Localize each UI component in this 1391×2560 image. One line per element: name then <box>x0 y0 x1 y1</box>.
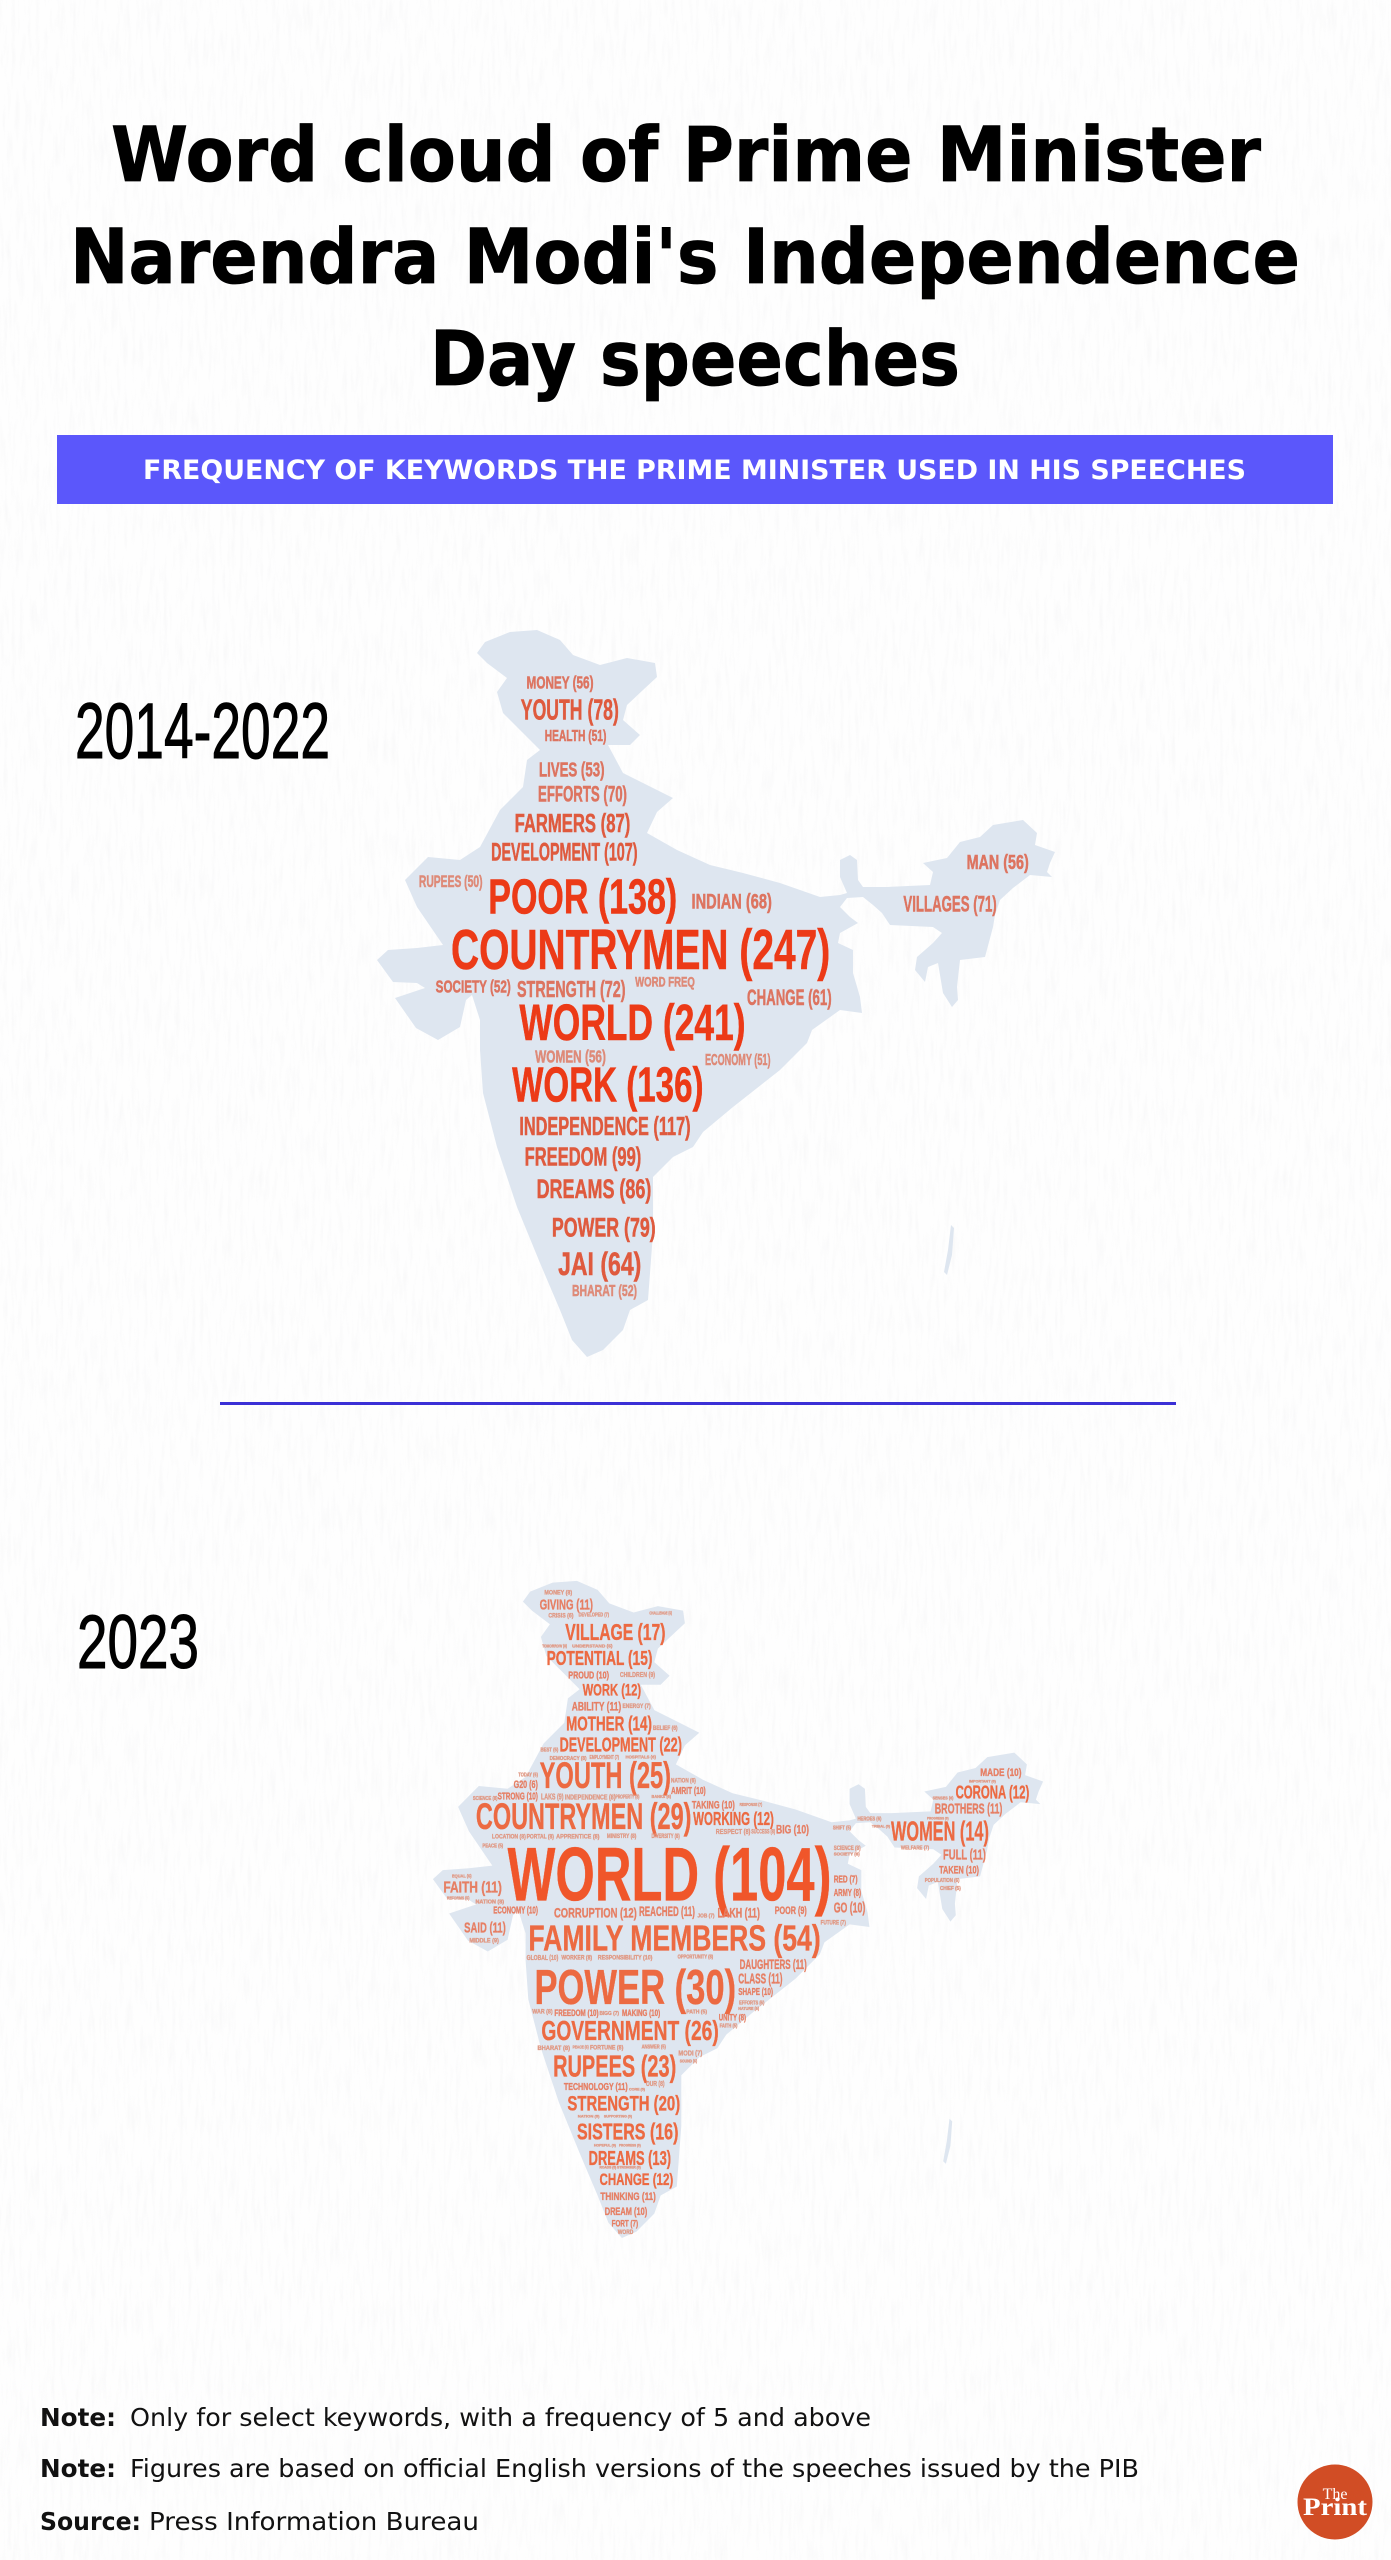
word cloud 2014-2022: INDEPENDENCE (117) <box>519 1113 691 1141</box>
word cloud 2023: JOB (7) <box>698 1913 714 1919</box>
word cloud 2023: LOCATION (8) <box>492 1832 526 1840</box>
word cloud 2023: MIDDLE (9) <box>469 1937 499 1944</box>
word cloud 2023: SENSES (6) <box>933 1796 954 1801</box>
notes and source: Figures are based on official English versions of the speeches issued by the PIB <box>130 2454 1139 2483</box>
word cloud 2014-2022: YOUTH (78) <box>521 693 619 725</box>
word cloud 2023: NATURE (5) <box>738 2007 759 2012</box>
word cloud 2023: SUCCESS (8) <box>751 1827 775 1835</box>
word cloud 2023: DREAMS (13) <box>589 2147 671 2169</box>
word cloud 2023: EQUAL (5) <box>452 1874 472 1879</box>
word cloud 2023: WORKING (12) <box>693 1809 774 1829</box>
India map shape <box>377 630 1055 1357</box>
word cloud 2023: OUR (8) <box>646 2079 665 2088</box>
word cloud 2023: FAMILY MEMBERS (54) <box>528 1918 821 1958</box>
word cloud 2023: NATION (6) <box>671 1777 696 1784</box>
word cloud 2023: RESPONSE (7) <box>740 1803 762 1808</box>
notes and source <box>40 2403 1139 2536</box>
word cloud 2023: MODI (7) <box>678 2048 702 2057</box>
word cloud 2014-2022: STRENGTH (72) <box>517 977 626 1002</box>
word cloud 2014-2022: BHARAT (52) <box>572 1283 637 1300</box>
word cloud 2023: CLASS (11) <box>738 1970 783 1987</box>
word cloud 2023: COUNTRYMEN (29) <box>476 1796 691 1838</box>
logo: ThePrint: The <box>1323 2486 1347 2503</box>
notes and source: Note: <box>40 2454 116 2483</box>
word cloud 2023: PROGRESS (6) <box>927 1816 949 1820</box>
word cloud 2023: MINISTRY (8) <box>607 1832 637 1840</box>
word cloud 2023: PEACE (5) <box>482 1843 503 1849</box>
logo: ThePrint <box>1298 2464 1372 2540</box>
word cloud 2023: FULL (11) <box>943 1846 986 1863</box>
word cloud 2023: SCIENCE (8) <box>834 1844 861 1852</box>
word cloud 2014-2022: LIVES (53) <box>539 759 604 782</box>
word cloud 2023: UNDERSTAND (5) <box>572 1644 613 1649</box>
word cloud 2023: DEVELOPED (7) <box>579 1612 609 1618</box>
word cloud 2023: MADE (10) <box>980 1766 1021 1779</box>
word cloud 2023: DAUGHTERS (11) <box>740 1957 807 1972</box>
word cloud 2023: WOMEN (14) <box>891 1816 989 1847</box>
word cloud 2023: PROPERTY (8) <box>616 1794 639 1800</box>
word cloud 2023: POWER (30) <box>534 1960 736 2015</box>
word cloud 2023: TRIBAL (5) <box>872 1824 890 1828</box>
word cloud 2023: FAITH (5) <box>720 2023 737 2029</box>
word cloud 2023: DEVELOPMENT (22) <box>560 1734 682 1756</box>
word cloud 2014-2022: COUNTRYMEN (247) <box>451 918 830 981</box>
word cloud 2023: RESPONSIBILITY (10) <box>598 1953 653 1961</box>
word cloud 2023: FAITH (11) <box>443 1879 502 1896</box>
word cloud 2023: NATION (8) <box>475 1899 504 1905</box>
word cloud 2023: WORLD (104) <box>508 1832 832 1917</box>
word cloud 2023: PATH (5) <box>686 2009 707 2015</box>
word cloud 2023: ECONOMY (10) <box>493 1905 538 1916</box>
word cloud 2023: MONEY (8) <box>544 1588 573 1596</box>
word cloud 2023: WORK (12) <box>583 1682 641 1700</box>
notes and source: Press Information Bureau <box>149 2507 479 2536</box>
word cloud 2023: DIVERSITY (8) <box>652 1832 680 1840</box>
word cloud 2023: G20 (6) <box>514 1778 538 1791</box>
word cloud 2023: SAID (11) <box>464 1920 506 1936</box>
word cloud 2014-2022: MONEY (56) <box>527 672 593 693</box>
word cloud 2023: LAKS (9) <box>541 1793 564 1802</box>
word cloud 2023: TAKEN (10) <box>939 1863 979 1876</box>
word cloud 2014-2022: VILLAGES (71) <box>903 892 997 916</box>
word cloud 2023: TECHNOLOGY (11) <box>564 2081 628 2093</box>
word cloud 2014-2022: POWER (79) <box>552 1212 656 1243</box>
word cloud 2023: VILLAGE (17) <box>565 1618 665 1645</box>
word cloud 2023: IMPORTANT (6) <box>969 1779 996 1784</box>
logo: ThePrint: Print <box>1303 2494 1368 2521</box>
word cloud 2023: CRISIS (6) <box>548 1611 574 1619</box>
word cloud 2023: GOVERNMENT (26) <box>541 2015 719 2046</box>
word cloud 2023: INDEPENDENCE (8) <box>565 1793 616 1801</box>
word cloud 2023: CORRUPTION (12) <box>554 1905 637 1921</box>
India map shape 2023 <box>433 1581 1043 2238</box>
word cloud 2014-2022: CHANGE (61) <box>747 986 832 1010</box>
word cloud 2023: PROUD (10) <box>568 1670 609 1681</box>
word cloud 2023: REACHED (11) <box>639 1904 695 1919</box>
subtitle banner: FREQUENCY OF KEYWORDS THE PRIME MINISTER USED IN HIS SPEECHES <box>143 455 1246 486</box>
word cloud 2023: POPULATION (6) <box>925 1878 959 1884</box>
subtitle banner <box>57 435 1333 504</box>
word cloud 2023: BIG (10) <box>776 1822 809 1836</box>
word cloud 2023: CHANGE (12) <box>600 2171 673 2189</box>
panel: map 2023 <box>433 1581 1043 2238</box>
word cloud 2014-2022: ECONOMY (51) <box>705 1052 770 1069</box>
word cloud 2023: FORTUNE (8) <box>590 2043 624 2051</box>
word cloud 2014-2022: WORD FREQ <box>635 974 695 990</box>
word cloud 2023: FUTURE (7) <box>821 1919 846 1926</box>
title: Narendra Modi's Independence <box>70 212 1300 301</box>
panel: map 2023: CORONA (12) <box>956 1782 1029 1803</box>
word cloud 2014-2022: WORK (136) <box>512 1059 704 1113</box>
word cloud 2023: PEACE (5) <box>573 2045 589 2050</box>
word cloud 2023: ANSWER (5) <box>642 2044 666 2050</box>
word cloud 2014-2022: RUPEES (50) <box>419 873 483 891</box>
period label 2014-2022: 2014-2022 <box>75 686 330 775</box>
title <box>70 110 1300 403</box>
word cloud 2023: ROADS (5) STRONGER (5) <box>600 2166 641 2169</box>
word cloud 2023: WELFARE (7) <box>901 1845 929 1851</box>
word cloud 2014-2022: FREEDOM (99) <box>525 1143 641 1172</box>
word cloud 2023: FREEDOM (10) <box>554 2008 599 2019</box>
word cloud 2023: GLOBAL (10) <box>527 1953 558 1962</box>
word cloud 2014-2022: DREAMS (86) <box>537 1173 651 1204</box>
word cloud 2023: EMPLOYMENT (7) <box>590 1755 619 1761</box>
word cloud 2023: REFORMS (5) <box>447 1896 470 1901</box>
word cloud 2023: CHIEF (5) <box>940 1886 961 1892</box>
word cloud 2023: HOPEFUL (6) <box>594 2143 616 2147</box>
word cloud 2023: EFFORTS (6) <box>739 2000 764 2006</box>
notes and source: Note: <box>40 2403 116 2432</box>
word cloud 2023: AMRIT (10) <box>671 1785 706 1797</box>
word cloud 2023: BHARAT (8) <box>537 2044 570 2052</box>
word cloud 2023: BIGG (7) <box>600 2011 619 2017</box>
word cloud 2023: ARMY (8) <box>834 1887 861 1899</box>
word cloud 2014-2022: WORLD (241) <box>519 994 746 1051</box>
word cloud 2023: HOSPITALS (6) <box>626 1755 656 1760</box>
word cloud 2023: WORKER (8) <box>561 1953 593 1961</box>
word cloud 2023: PROGRESS (5) <box>619 2143 641 2147</box>
word cloud 2023: SISTERS (16) <box>577 2118 678 2144</box>
word cloud 2023: FORT (7) <box>612 2219 638 2229</box>
title: Word cloud of Prime Minister <box>111 110 1261 199</box>
word cloud 2023: POOR (9) <box>775 1904 807 1917</box>
word cloud 2023: MAKING (10) <box>622 2008 660 2019</box>
word cloud 2023: BEST (6) <box>541 1747 558 1753</box>
word cloud 2023: LAKH (11) <box>717 1905 760 1921</box>
word cloud 2023: TAKING (10) <box>692 1798 735 1811</box>
word cloud 2014-2022: EFFORTS (70) <box>538 782 627 807</box>
word cloud 2023: TODAY (6) <box>518 1772 538 1778</box>
word cloud 2014-2022 <box>419 672 1029 1300</box>
word cloud 2023: SHIFT (5) <box>833 1825 851 1831</box>
word cloud 2023: SOUND (5) <box>680 2059 697 2064</box>
word cloud 2023: STRENGTH (20) <box>567 2093 680 2116</box>
title: Day speeches <box>430 314 960 403</box>
word cloud 2023: UNITY (8) <box>719 2013 746 2023</box>
divider line <box>220 1402 1176 1405</box>
word cloud 2023: GIVING (11) <box>540 1596 593 1613</box>
word cloud 2023: CHALLENGE (5) <box>649 1611 672 1616</box>
word cloud 2023: THINKING (11) <box>600 2190 656 2203</box>
word cloud 2023: GO (10) <box>834 1900 865 1916</box>
word cloud 2023: TOMORROW (8) <box>542 1644 567 1649</box>
word cloud 2023: RUPEES (23) <box>553 2049 676 2084</box>
word cloud 2023: WORD <box>618 2228 633 2236</box>
word cloud 2023: NATION (5) <box>578 2114 600 2118</box>
word cloud 2014-2022: POOR (138) <box>488 871 677 925</box>
word cloud 2023: SHAPE (10) <box>738 1986 773 1998</box>
word cloud 2014-2022: INDIAN (68) <box>692 890 772 913</box>
word cloud 2023: BANKS (6) <box>652 1795 671 1800</box>
word cloud 2023: SUPPORTING (5) <box>604 2114 632 2118</box>
word cloud 2014-2022: FARMERS (87) <box>515 809 630 838</box>
word cloud 2023: WAR (8) <box>532 2007 553 2015</box>
notes and source: Source: <box>40 2507 141 2536</box>
word cloud 2023: HEROES (6) <box>858 1816 881 1822</box>
word cloud 2023: STRONG (10) <box>498 1791 538 1802</box>
word cloud 2014-2022: DEVELOPMENT (107) <box>491 839 638 867</box>
word cloud 2023: PORTAL (8) <box>527 1832 554 1840</box>
word cloud 2023: SOCIETY (6) <box>834 1852 860 1857</box>
word cloud 2023: ABILITY (11) <box>572 1699 621 1713</box>
word cloud 2023: POTENTIAL (15) <box>547 1647 652 1669</box>
period label 2023: 2023 <box>77 1600 199 1685</box>
word cloud 2023: APPRENTICE (8) <box>556 1832 600 1840</box>
word cloud 2023: DREAM (10) <box>605 2205 647 2218</box>
word cloud 2023: SCIENCE (8) <box>473 1796 498 1802</box>
word cloud 2023: MOTHER (14) <box>566 1713 652 1735</box>
word cloud 2014-2022: JAI (64) <box>558 1245 641 1282</box>
word cloud 2014-2022: WOMEN (56) <box>535 1046 606 1067</box>
word cloud 2014-2022: SOCIETY (52) <box>436 976 511 997</box>
word cloud 2023: ENERGY (7) <box>622 1702 651 1710</box>
word cloud 2023: RESPECT (8) <box>716 1827 751 1836</box>
word cloud 2023: BROTHERS (11) <box>935 1800 1002 1817</box>
notes and source: Only for select keywords, with a frequency of 5 and above <box>130 2403 871 2432</box>
word cloud 2023: RED (7) <box>834 1874 858 1885</box>
word cloud 2023: CORE (5) <box>629 2087 645 2091</box>
word cloud 2014-2022: MAN (56) <box>967 852 1029 874</box>
word cloud 2023: CHILDREN (9) <box>620 1670 655 1679</box>
word cloud 2023: DEMOCRACY (8) <box>550 1756 586 1762</box>
word cloud 2023: BELIEF (6) <box>653 1724 678 1732</box>
word cloud 2023 <box>443 1588 1029 2236</box>
panel: map 2014-2022 <box>377 630 1055 1357</box>
word cloud 2014-2022: HEALTH (51) <box>545 728 606 745</box>
word cloud 2023: OPPORTUNITY (8) <box>678 1954 713 1960</box>
word cloud 2023: YOUTH (25) <box>540 1755 671 1797</box>
